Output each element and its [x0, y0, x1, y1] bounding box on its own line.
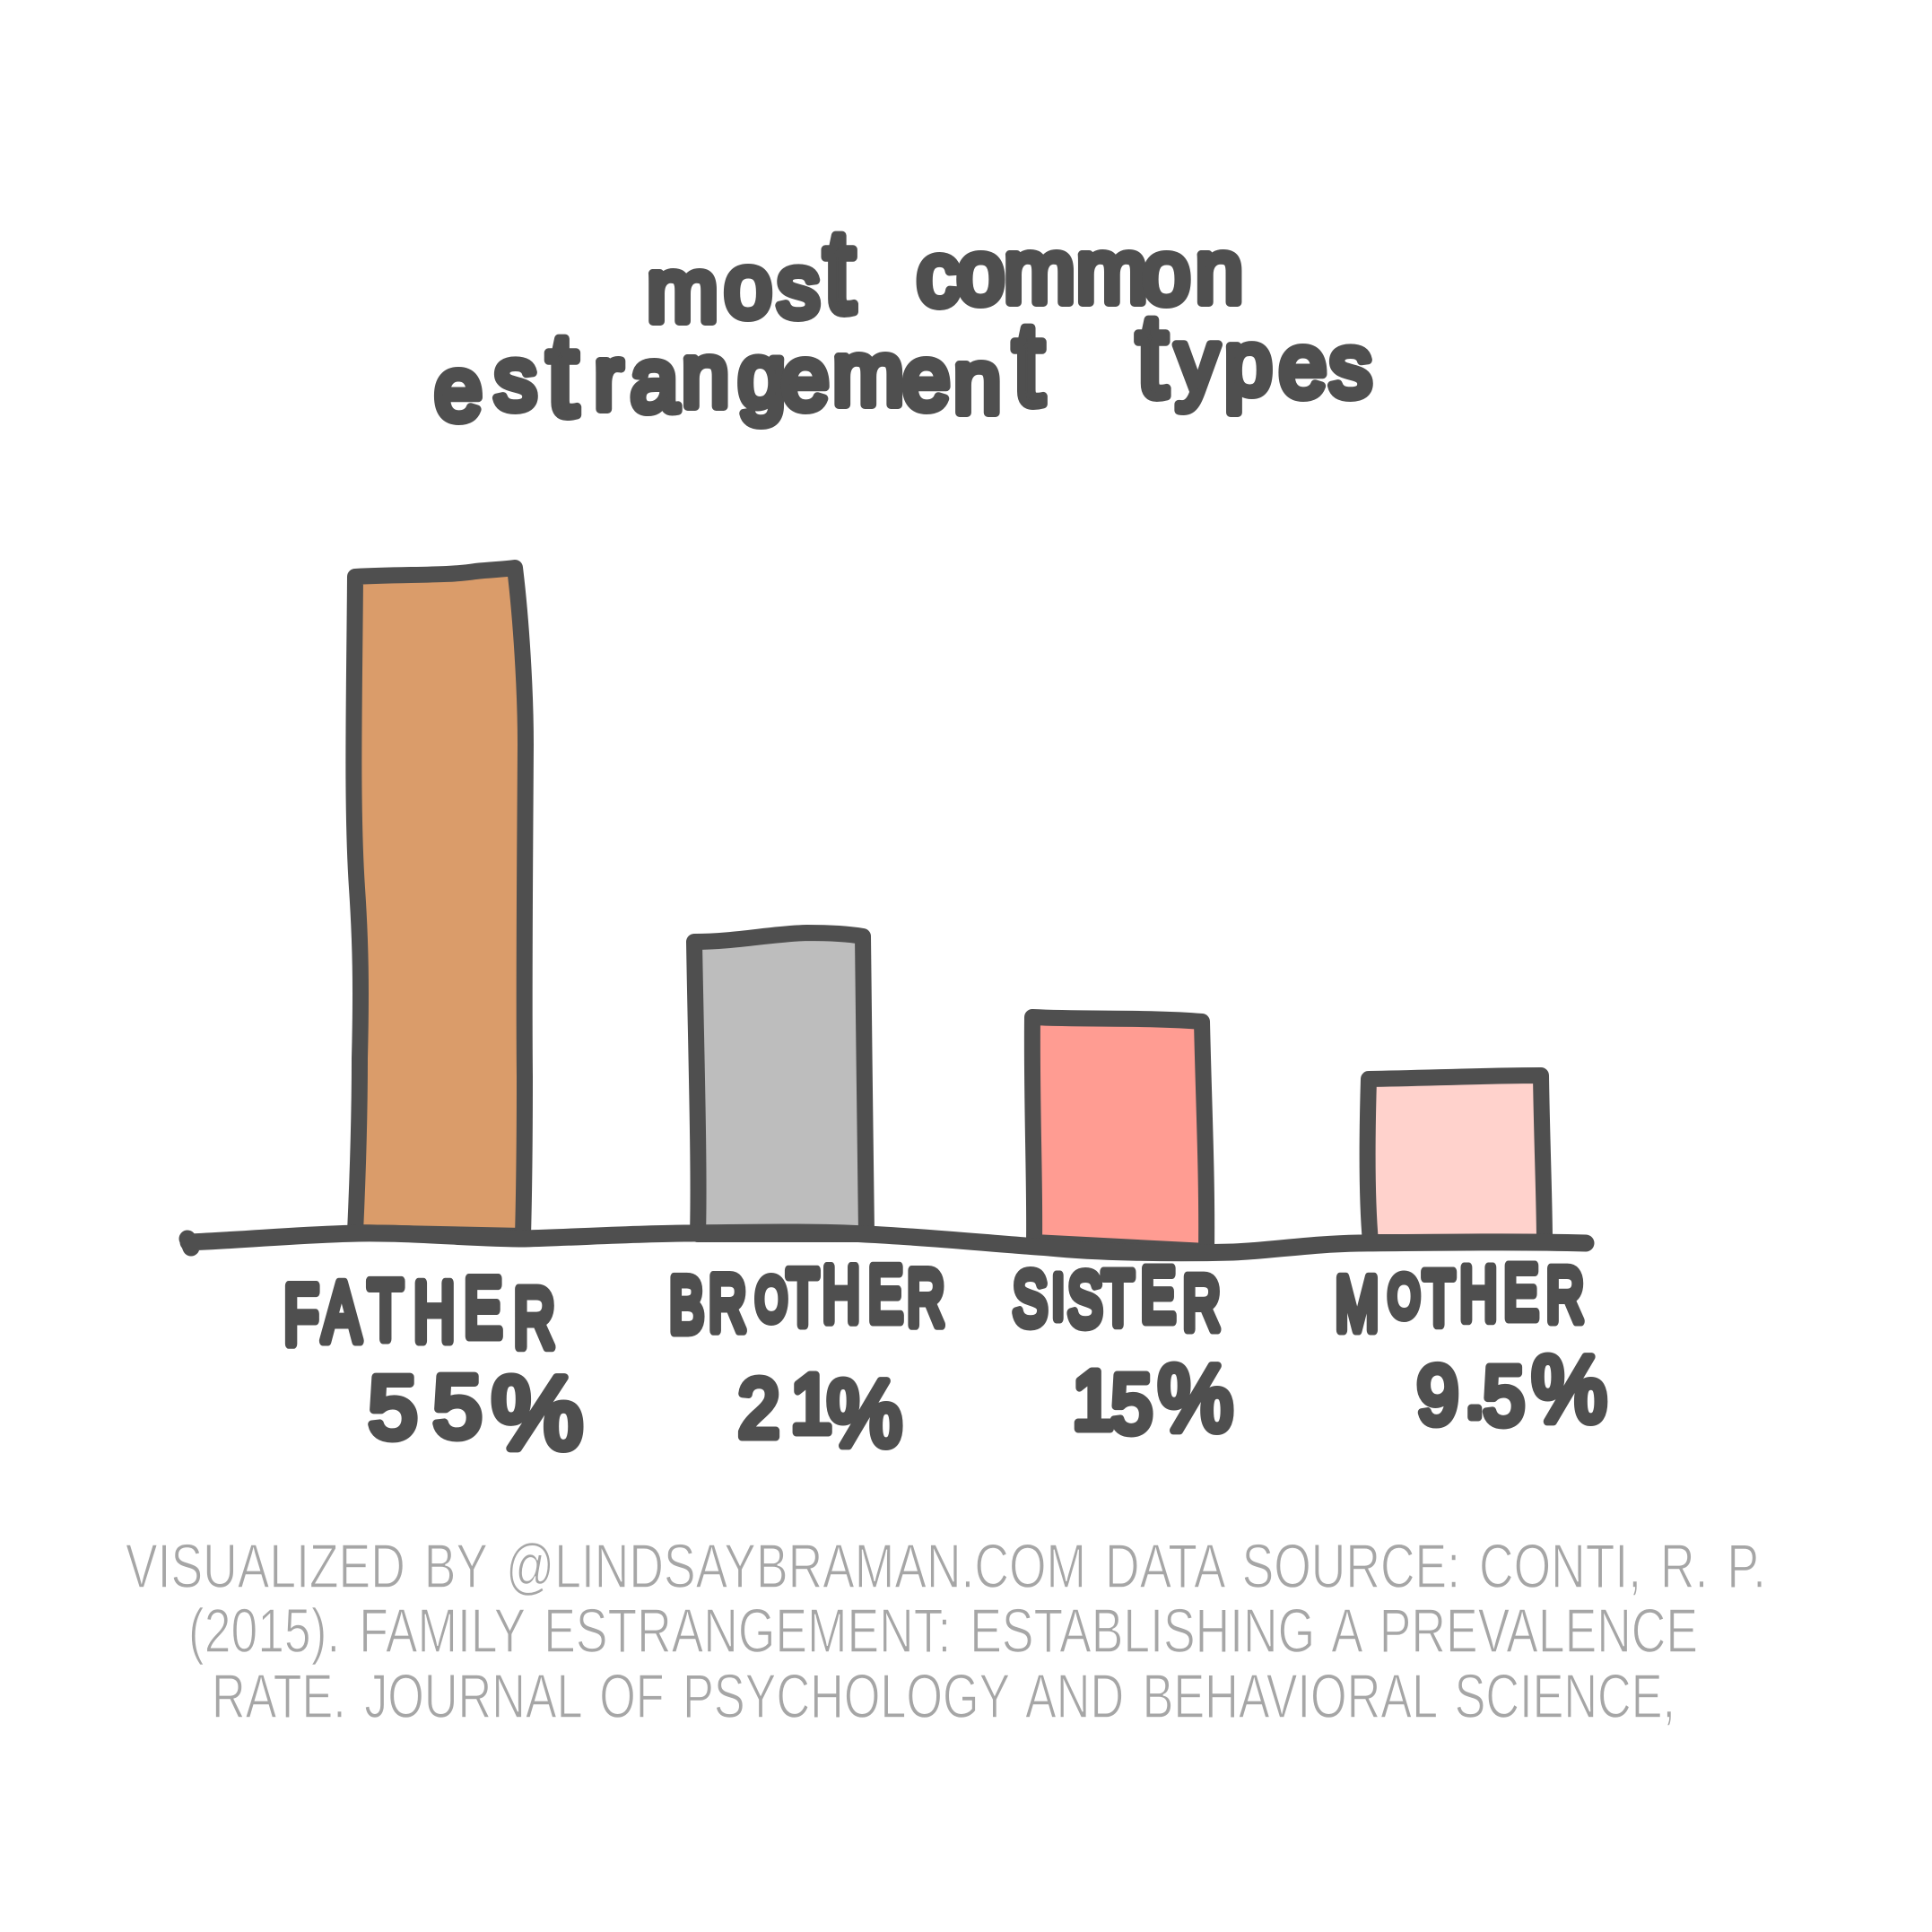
value: brother 21%: 21%	[738, 1357, 902, 1466]
source credit text	[126, 1531, 1766, 1731]
bar: father 55%	[353, 568, 526, 1236]
title	[435, 205, 1371, 441]
bar chart	[187, 568, 1586, 1253]
title: most	[647, 205, 855, 341]
bar: sister 15%	[1032, 1017, 1206, 1251]
value: mother 9.5%: 9.5%	[1417, 1337, 1607, 1442]
title: estrangement	[435, 298, 1044, 441]
bar: brother 21%	[694, 933, 866, 1234]
value: father 55%: 55%	[369, 1356, 583, 1471]
label: sister: SISTER	[1013, 1253, 1220, 1346]
value: sister 15%: 15%	[1072, 1346, 1233, 1451]
title: common	[917, 222, 1243, 325]
bar: mother 9.5%	[1368, 1075, 1545, 1242]
label: mother: MOTHER	[1336, 1250, 1584, 1347]
label: brother: BROTHER	[669, 1250, 944, 1349]
title: types	[1136, 290, 1371, 422]
baseline axis	[187, 1232, 1586, 1253]
label: father: FATHER	[283, 1261, 555, 1366]
